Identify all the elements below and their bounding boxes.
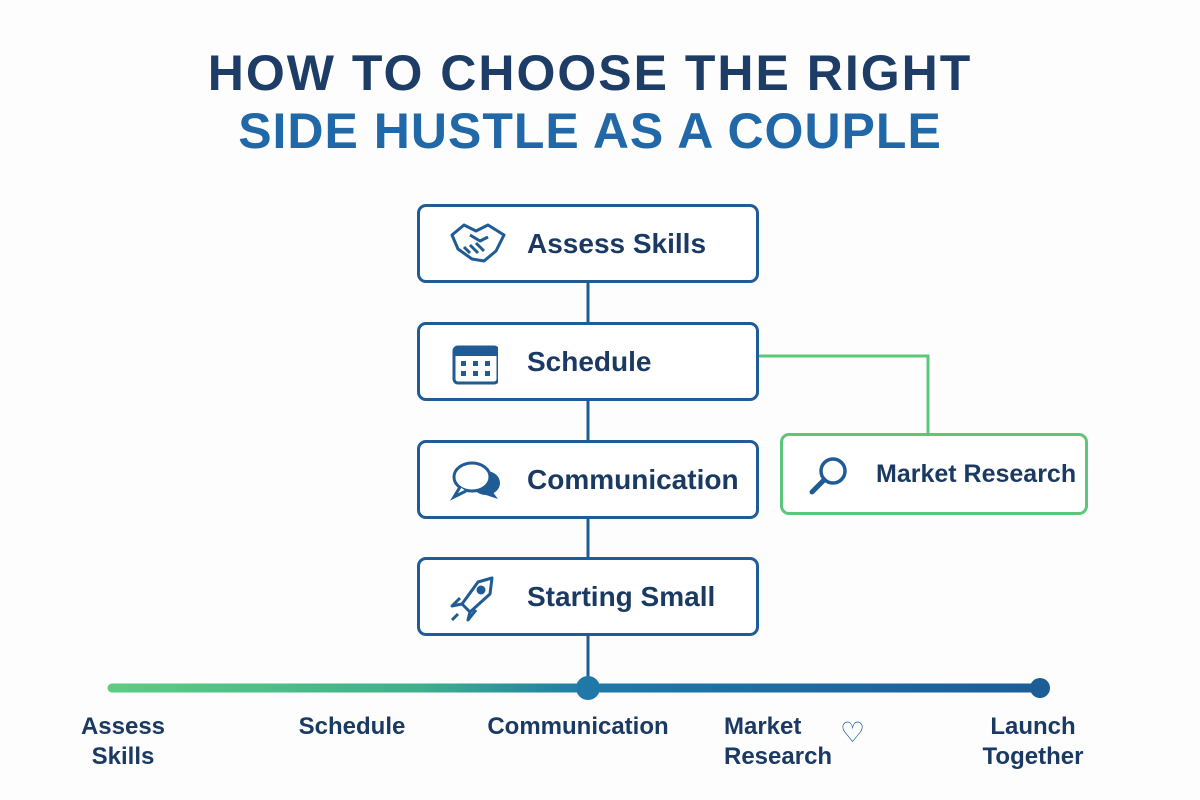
timeline labels: Research	[724, 743, 832, 770]
timeline labels: Schedule	[299, 713, 405, 740]
box: Schedule: Schedule	[527, 346, 651, 377]
box: Schedule	[417, 322, 759, 401]
box: Assess Skills: Assess Skills	[527, 228, 706, 259]
box: Starting Small: Starting Small	[527, 581, 715, 612]
timeline labels: Communication	[487, 713, 669, 740]
title: SIDE HUSTLE AS A COUPLE	[238, 103, 942, 159]
box: Communication: Communication	[527, 464, 739, 495]
box: Market Research: Market Research	[876, 460, 1076, 488]
title	[208, 45, 972, 159]
timeline labels: Skills	[92, 743, 154, 770]
box: Starting Small	[417, 557, 759, 636]
timeline labels: Launch	[990, 713, 1076, 740]
box: Market Research	[780, 433, 1088, 515]
timeline labels	[81, 713, 1084, 770]
timeline labels: Market	[724, 713, 801, 740]
timeline labels: Assess	[81, 713, 165, 740]
box: Assess Skills	[417, 204, 759, 283]
icon: magnifier	[810, 457, 847, 494]
timeline labels: Together	[983, 743, 1083, 770]
title: HOW TO CHOOSE THE RIGHT	[208, 45, 972, 101]
icon: heart: ♡	[840, 717, 865, 748]
box: Communication	[417, 440, 759, 519]
